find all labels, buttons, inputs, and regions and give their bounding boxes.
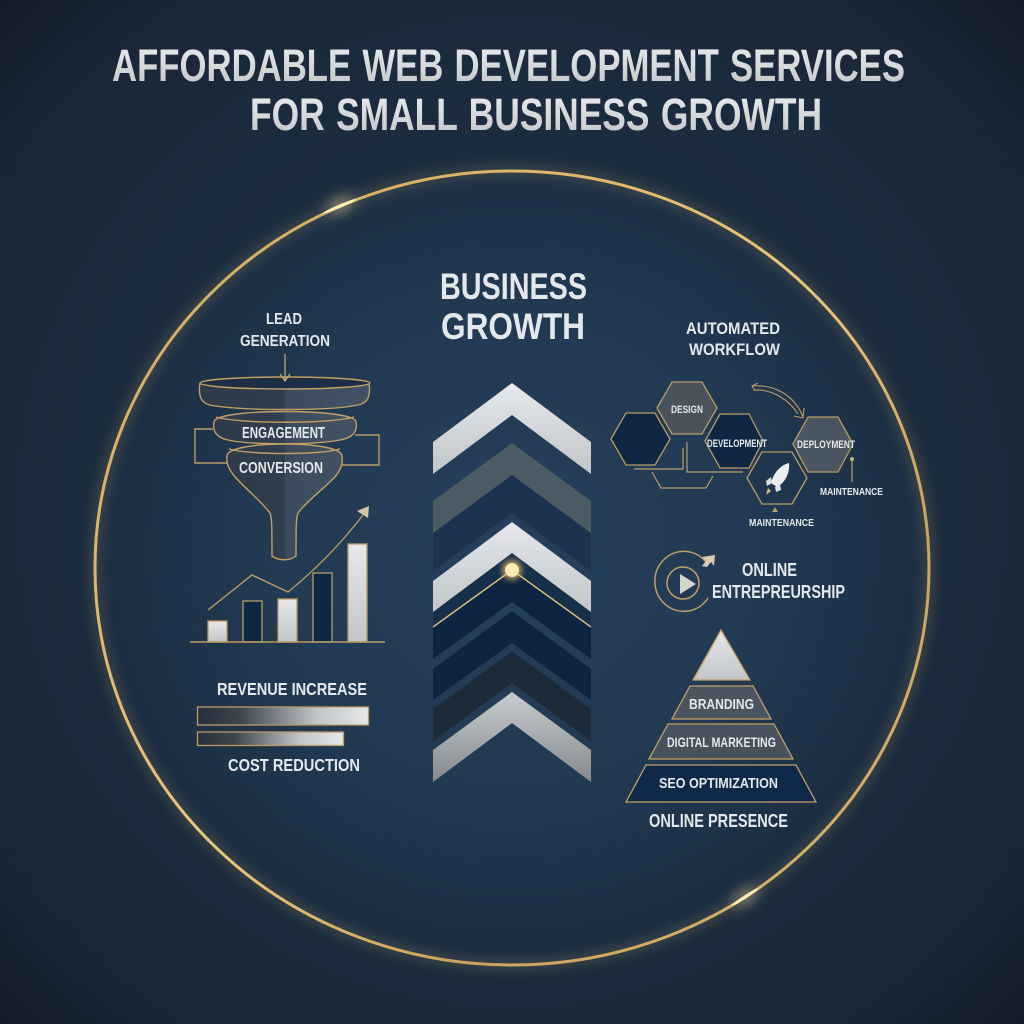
- connectors: [634, 442, 743, 488]
- cost label: COST REDUCTION: [228, 755, 360, 775]
- funnel labels: [240, 311, 330, 350]
- axis: [190, 641, 385, 643]
- funnel labels: GENERATION: [240, 333, 330, 350]
- hexagon: blank: [611, 413, 670, 465]
- chevron stack: [433, 383, 591, 782]
- curved cycle arrow: [752, 383, 804, 418]
- workflow heading: AUTOMATED: [686, 320, 780, 338]
- maintenance right: MAINTENANCE: [820, 486, 883, 498]
- revenue label: REVENUE INCREASE: [217, 679, 367, 699]
- funnel spout: [227, 444, 342, 560]
- entrepreneurship label: ENTREPREURSHIP: [712, 582, 845, 602]
- heading: business growth: [440, 266, 587, 347]
- hexagon: design: [657, 382, 717, 434]
- entrepreneurship label: [712, 560, 845, 602]
- panel: funnel: [195, 311, 379, 560]
- pyramid tier: digital marketing: DIGITAL MARKETING: [667, 735, 776, 750]
- panel: central business growth: [433, 266, 591, 782]
- trend arrow: [208, 506, 369, 610]
- hexagon: deployment: DEPLOYMENT: [797, 439, 855, 451]
- hexagon: rocket: [747, 452, 807, 504]
- revenue bar: [198, 707, 368, 725]
- pyramid tier: seo optimization: [626, 765, 816, 802]
- workflow heading: [686, 320, 780, 359]
- panel: pyramid: [626, 630, 816, 831]
- entrepreneurship label: ONLINE: [742, 560, 797, 580]
- heading: business growth: BUSINESS: [440, 266, 587, 307]
- pyramid tier: seo optimization: SEO OPTIMIZATION: [659, 775, 778, 792]
- engagement and conversion labels: ENGAGEMENT: [242, 425, 325, 442]
- hexagon: deployment: [793, 417, 855, 472]
- panel: revenue and cost: [198, 679, 368, 775]
- engagement and conversion labels: CONVERSION: [239, 460, 323, 477]
- circular frame: [95, 171, 929, 965]
- hexagon: development: [705, 414, 767, 468]
- funnel brackets: [195, 429, 379, 465]
- bar chart: [190, 506, 385, 642]
- maintenance lower: MAINTENANCE: [749, 517, 814, 529]
- hexagon: design: DESIGN: [671, 404, 703, 416]
- pyramid tier: digital marketing: [649, 724, 793, 759]
- heading: business growth: GROWTH: [441, 306, 585, 347]
- gold line and node: [433, 560, 591, 627]
- panel: online entrepreneurship: [655, 551, 845, 611]
- pyramid top: [693, 630, 750, 680]
- pyramid tier: branding: [672, 686, 771, 719]
- icon: rocket: [766, 463, 789, 495]
- funnel middle ring: [214, 412, 356, 444]
- bars: [208, 544, 367, 642]
- icon: play cycle: [655, 551, 715, 611]
- funnel top ring: [199, 377, 370, 410]
- cost bar: [198, 732, 344, 746]
- engagement and conversion labels: [239, 425, 325, 477]
- funnel labels: LEAD: [266, 311, 302, 328]
- title: [112, 40, 905, 140]
- pyramid tier: branding: BRANDING: [689, 696, 754, 713]
- online presence label: ONLINE PRESENCE: [649, 811, 788, 831]
- panel: automated workflow: [611, 320, 883, 529]
- title: FOR SMALL BUSINESS GROWTH: [250, 89, 822, 140]
- hexagon: development: DEVELOPMENT: [707, 438, 767, 450]
- workflow heading: WORKFLOW: [689, 341, 780, 359]
- ring highlights: [323, 193, 761, 910]
- funnel arrow: [280, 354, 290, 381]
- maintenance right: [820, 457, 883, 498]
- maintenance lower: [749, 507, 814, 529]
